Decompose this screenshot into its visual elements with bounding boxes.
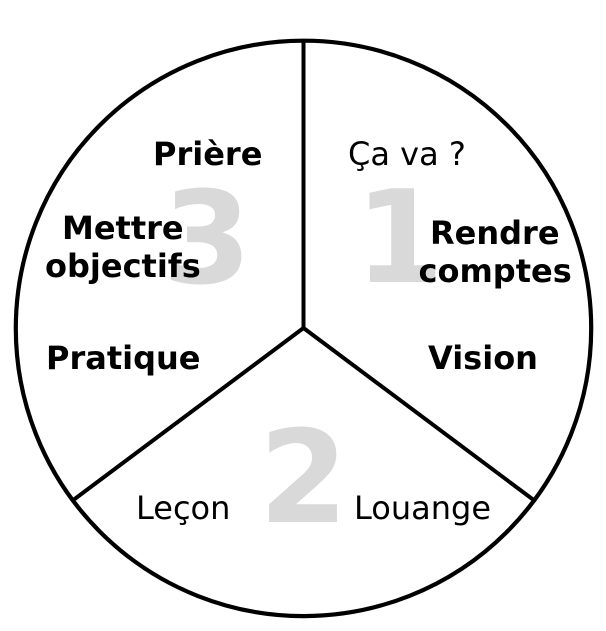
sector dividers — [74, 41, 533, 500]
large number 2: 2 — [259, 404, 348, 553]
label: Mettre objectifs: Mettre — [62, 209, 184, 247]
large number 1: 1 — [355, 164, 444, 313]
label: Mettre objectifs: objectifs — [45, 247, 201, 285]
sector 1 labels — [348, 135, 572, 377]
large number 3: 3 — [162, 164, 252, 314]
sector 3 labels — [45, 135, 262, 377]
label: Leçon: Leçon — [136, 489, 230, 527]
label: Louange: Louange — [354, 489, 491, 527]
label: Pratique: Pratique — [46, 339, 200, 377]
label: Rendre comptes: comptes — [418, 252, 572, 290]
label: Rendre comptes: Rendre — [430, 214, 560, 252]
label: Ça va ?: Ça va ? — [348, 135, 466, 173]
label: Prière: Prière — [153, 135, 262, 173]
label: Vision: Vision — [428, 339, 538, 377]
sector 2 labels — [136, 489, 491, 527]
label: Mettre objectifs — [45, 209, 201, 285]
label: Rendre comptes — [418, 214, 572, 290]
